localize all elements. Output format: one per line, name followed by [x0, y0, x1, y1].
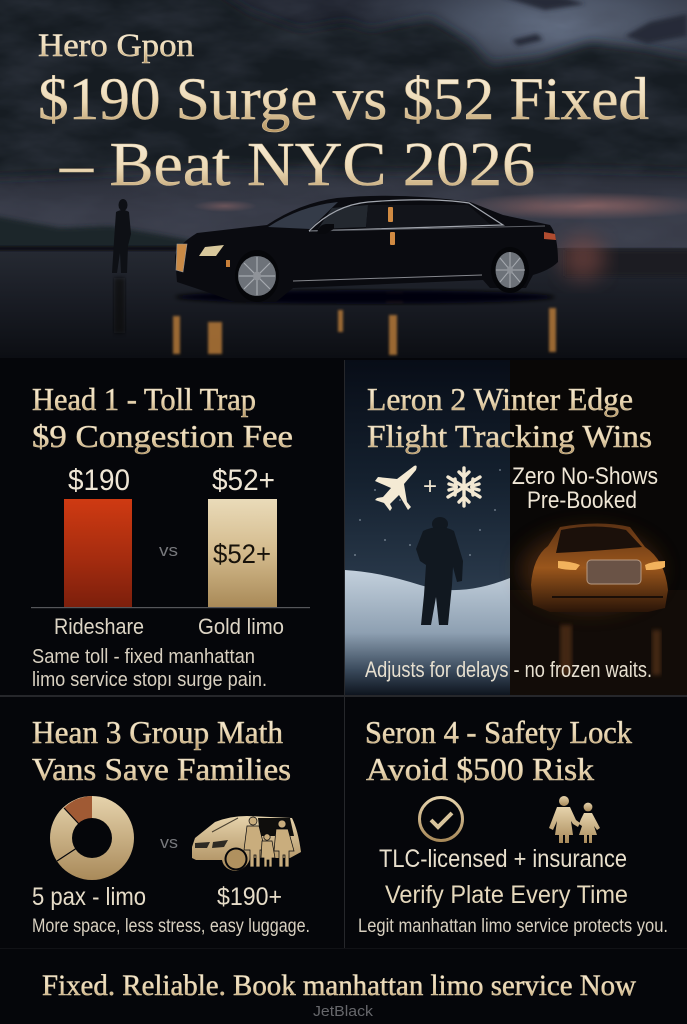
- hero title kicker: Hero Gpon: [38, 28, 194, 64]
- bar chart: rideshare vs gold limo: $190: [68, 464, 130, 497]
- vs label: vs: [160, 833, 178, 852]
- panel 2 heading: Leron 2 Winter Edge: [367, 381, 633, 417]
- donut chart: [50, 796, 134, 880]
- bar chart: rideshare vs gold limo: Rideshare: [54, 614, 144, 639]
- panel: winter edge: [345, 360, 687, 695]
- footer call to action: Fixed. Reliable. Book manhattan limo service Now: [42, 969, 636, 1002]
- bar chart: rideshare vs gold limo: [31, 464, 310, 639]
- hero headline line 2: – Beat NYC 2026: [59, 131, 535, 199]
- limousine: [175, 196, 558, 304]
- winter scene left half: [345, 360, 510, 695]
- bar chart: rideshare vs gold limo: $52+: [213, 539, 271, 569]
- zero no-shows label: [512, 463, 658, 514]
- icon: van with family: [192, 816, 301, 871]
- panel 4 heading: Seron 4 - Safety Lock: [365, 714, 632, 750]
- zero no-shows label: Zero No-Shows: [512, 463, 658, 490]
- verify plate label: Verify Plate Every Time: [385, 881, 628, 909]
- storm clouds: [0, 0, 687, 178]
- panel 1 caption: Same toll - fixed manhattan: [32, 646, 255, 668]
- icon: snowflake: [448, 468, 480, 506]
- passenger label: 5 pax - limo: [32, 883, 146, 911]
- panel: toll trap: [0, 360, 344, 695]
- panel 1 caption: [32, 646, 267, 691]
- panel 3 heading: [32, 714, 291, 787]
- headlights: [176, 244, 187, 272]
- panel 4 heading: [365, 714, 632, 787]
- panel 4 heading: Avoid $500 Risk: [366, 751, 594, 787]
- zero no-shows label: Pre-Booked: [527, 487, 637, 514]
- hero headline line 1: $190 Surge vs $52 Fixed: [38, 66, 649, 132]
- panel 3 heading: Hean 3 Group Math: [32, 714, 283, 750]
- panel 1 heading: $9 Congestion Fee: [32, 418, 293, 454]
- panel: group math: [0, 697, 344, 948]
- orange luxury car: [531, 524, 668, 612]
- panel 2 heading: [367, 381, 652, 454]
- icon: parent and child: [549, 796, 600, 843]
- bar chart: rideshare vs gold limo: Gold limo: [198, 614, 284, 639]
- person silhouette: [112, 199, 131, 273]
- panel 3 caption: More space, less stress, easy luggage.: [32, 916, 310, 937]
- panel 2 heading: Flight Tracking Wins: [367, 418, 652, 454]
- icon: plus: +: [423, 473, 437, 500]
- icon: airplane: [375, 466, 417, 511]
- icon: check circle: [420, 798, 462, 840]
- bar chart: rideshare vs gold limo: vs: [159, 541, 178, 560]
- night scene right half: [510, 360, 687, 695]
- traveller in snow: [416, 517, 463, 625]
- wheels: [235, 250, 279, 302]
- price label: $190+: [217, 883, 282, 911]
- panel 1 heading: [32, 381, 293, 454]
- hero black bottom edge: [0, 358, 687, 360]
- panel 3 heading: Vans Save Families: [32, 751, 291, 787]
- hero photo: limo on wet tarmac at dusk: [0, 0, 687, 358]
- wet road reflections: [173, 293, 556, 355]
- brand name: JetBlack: [313, 1003, 374, 1020]
- panel: safety lock: [345, 697, 687, 948]
- tlc licensed label: TLC-licensed + insurance: [379, 845, 627, 873]
- panel 1 caption: limo service stopı surge pain.: [32, 669, 267, 691]
- bar chart: rideshare vs gold limo: $52+: [212, 464, 275, 497]
- panel 1 heading: Head 1 - Toll Trap: [32, 381, 256, 417]
